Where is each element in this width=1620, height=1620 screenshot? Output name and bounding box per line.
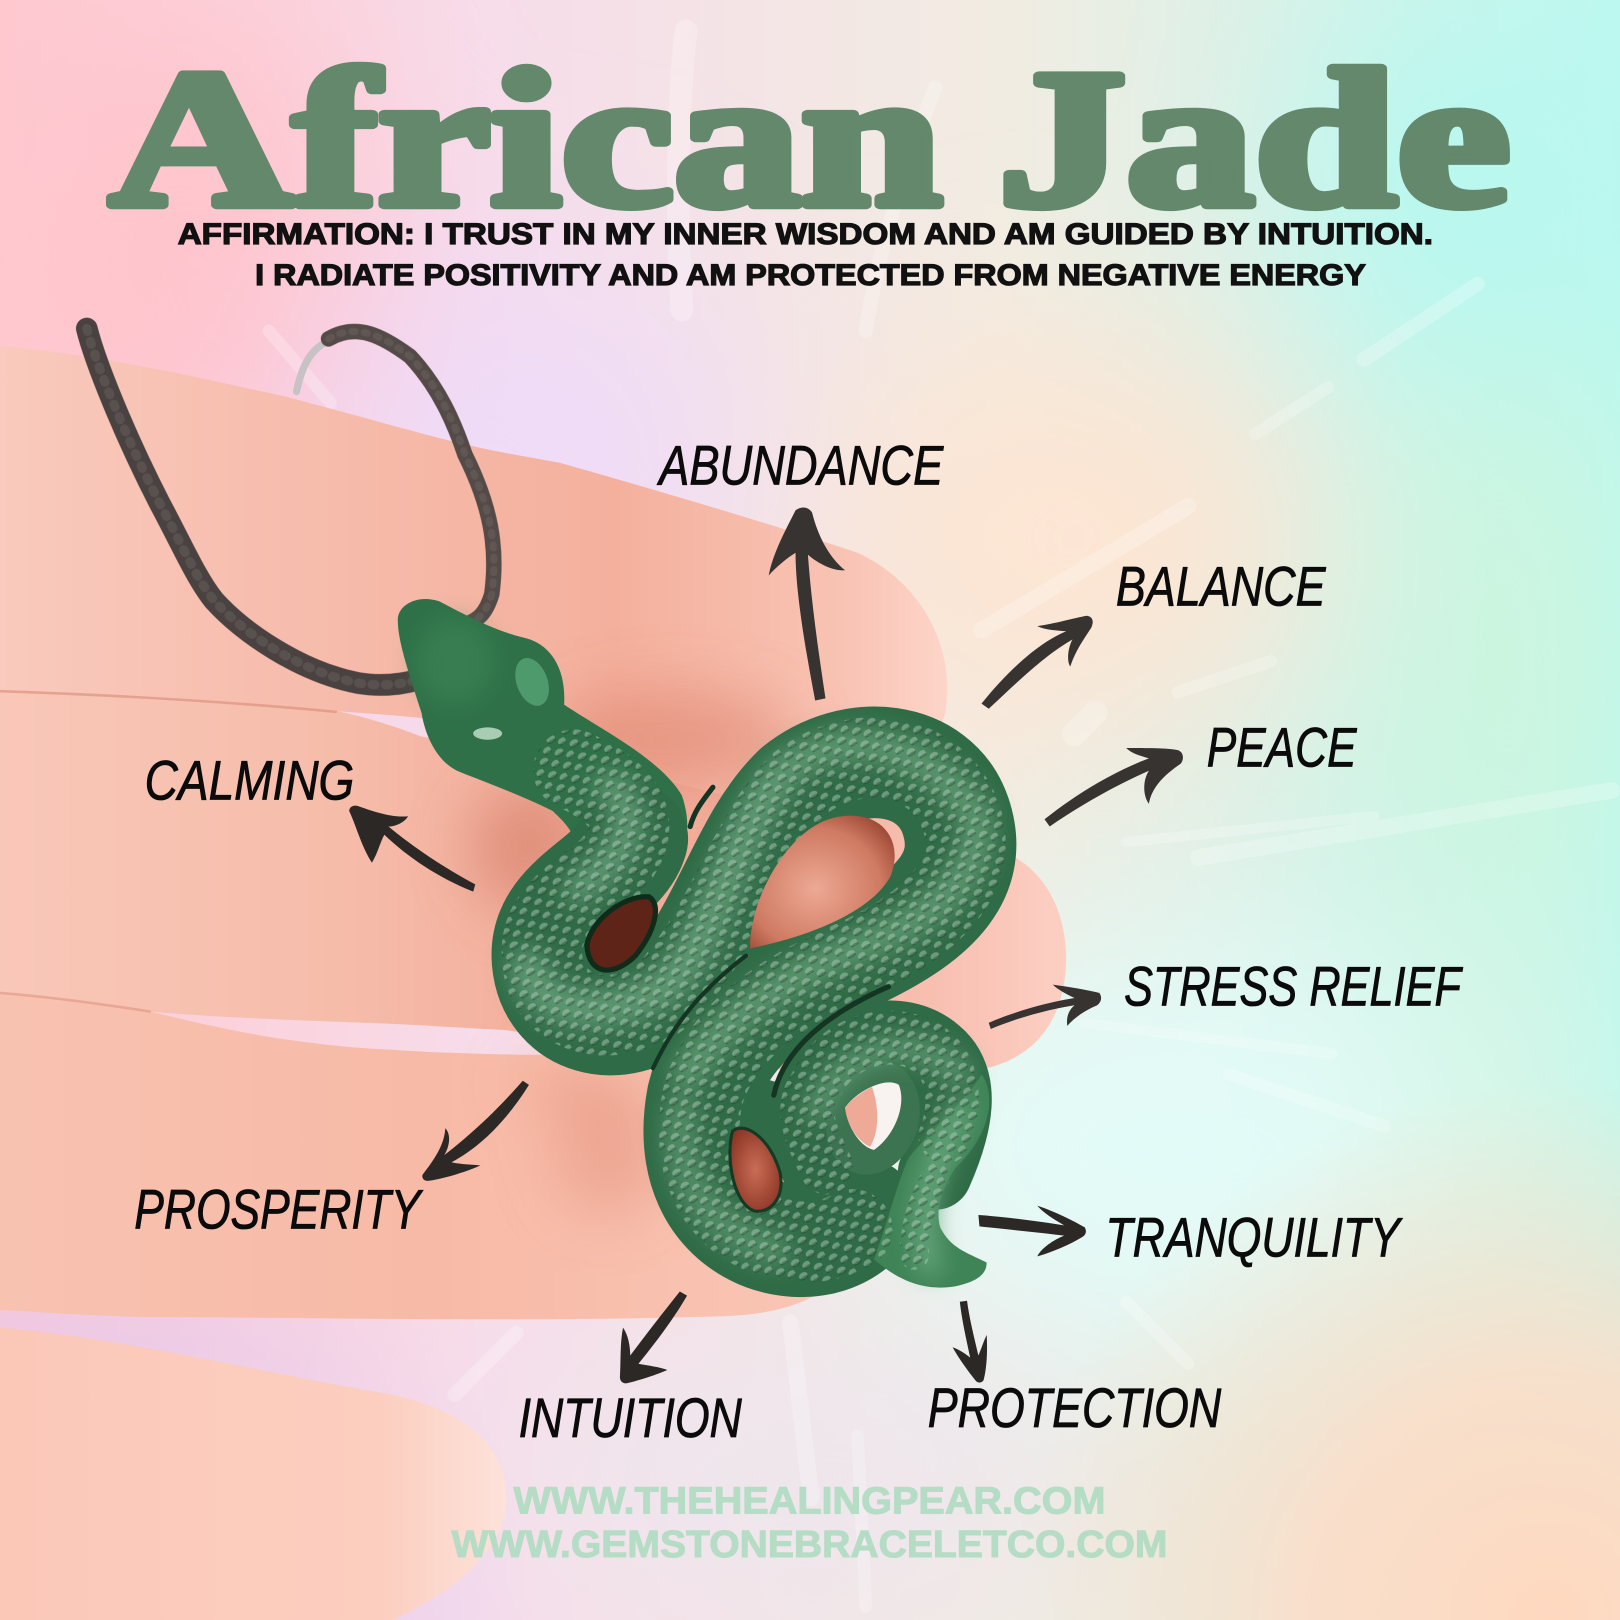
- cord: front strand: [87, 329, 494, 685]
- label: balance: BALANCE: [1116, 554, 1326, 617]
- arrow: peace: [1045, 748, 1183, 827]
- arrow: protection: [953, 1301, 987, 1383]
- affirmation text: AFFIRMATION: I TRUST IN MY INNER WISDOM AND AM GUIDED BY INTUITION.: [178, 218, 1433, 251]
- hole: tail opening: [845, 1082, 901, 1150]
- finger: index finger at top: [0, 346, 947, 816]
- finger gaps and creases: [0, 455, 336, 1011]
- arrow: calming: [349, 806, 475, 892]
- hole: small upper opening: [587, 897, 655, 970]
- body shading highlights: [527, 745, 977, 1266]
- arrow: intuition: [620, 1291, 687, 1383]
- title: African: [110, 31, 942, 248]
- finger: little finger at bottom: [0, 1328, 506, 1620]
- finger shading around pendant: [470, 689, 796, 1214]
- arrow: tranquility: [978, 1206, 1086, 1256]
- title: Jade: [998, 31, 1510, 248]
- hand with fingers: [0, 346, 1066, 1620]
- ring behind tail opening: [812, 1049, 934, 1187]
- label: tranquility: TRANQUILITY: [1105, 1205, 1403, 1268]
- head highlights: [415, 618, 555, 740]
- snake body: [547, 762, 961, 1241]
- website urls: WWW.THEHEALINGPEAR.COM: [513, 1480, 1105, 1523]
- label: protection: PROTECTION: [928, 1376, 1222, 1439]
- label: calming: CALMING: [145, 749, 354, 812]
- scale texture: [542, 758, 965, 1255]
- label: stress relief: STRESS RELIEF: [1124, 954, 1463, 1017]
- arrow: stress relief: [989, 985, 1101, 1029]
- arrow: prosperity: [422, 1081, 529, 1181]
- affirmation text: [178, 218, 1433, 292]
- snake head: [398, 599, 687, 868]
- arrow: abundance: [769, 508, 845, 700]
- label: intuition: INTUITION: [519, 1386, 742, 1449]
- label: abundance: ABUNDANCE: [657, 434, 944, 497]
- label: prosperity: PROSPERITY: [134, 1177, 424, 1240]
- finger: third finger: [0, 993, 863, 1319]
- website urls: WWW.GEMSTONEBRACELETCO.COM: [451, 1523, 1167, 1566]
- title: [110, 31, 1510, 248]
- jade snake pendant: [398, 599, 989, 1288]
- label: peace: PEACE: [1207, 716, 1357, 779]
- finger: second finger: [0, 690, 1066, 1069]
- website urls: [451, 1480, 1167, 1566]
- arrow: balance: [982, 616, 1093, 709]
- cord: back strand: [297, 341, 329, 392]
- hole: large opening: [750, 816, 895, 948]
- dark body seams: [653, 787, 889, 1095]
- affirmation text: I RADIATE POSITIVITY AND AM PROTECTED FROM NEGATIVE ENERGY: [255, 259, 1366, 292]
- snake tail: [874, 1074, 989, 1288]
- hole: lower opening: [730, 1128, 781, 1211]
